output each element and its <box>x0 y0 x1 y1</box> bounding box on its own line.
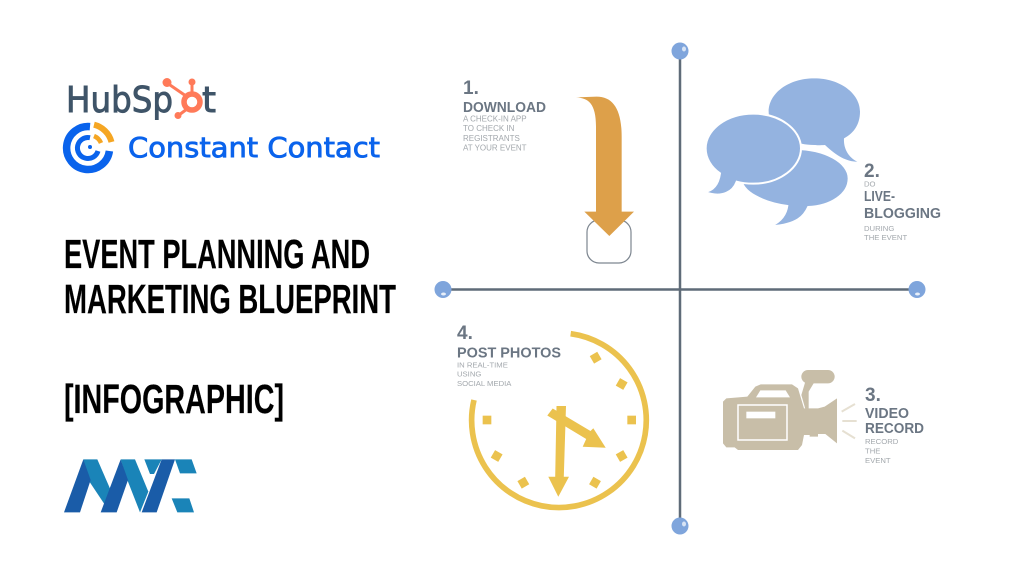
title: MARKETING BLUEPRINT <box>64 276 396 322</box>
logo: Constant Contact: Constant Contact <box>128 132 380 164</box>
text: live-blogging <box>864 161 941 242</box>
text: post photos: USING <box>457 370 481 378</box>
text: post photos: 4. <box>457 323 473 344</box>
text: download: AT YOUR EVENT <box>463 144 527 152</box>
text: download: REGISTRANTS <box>463 134 520 143</box>
text: post photos <box>457 323 561 388</box>
icon: clock <box>472 334 646 508</box>
text: video record: VIDEO <box>865 406 909 422</box>
text: post photos: SOCIAL MEDIA <box>457 379 512 388</box>
text: live-blogging: DO <box>864 180 876 188</box>
panel: step 3 video record <box>723 370 924 465</box>
text: download: DOWNLOAD <box>463 100 546 116</box>
text: video record: RECORD <box>865 421 924 437</box>
logo: Constant Contact <box>67 125 380 170</box>
text: download <box>463 78 546 152</box>
icon: speech bubbles <box>704 78 860 226</box>
text: video record: RECORD <box>865 437 899 446</box>
text: download: 1. <box>463 78 479 99</box>
text: download: A CHECK-IN APP <box>463 114 527 124</box>
title: EVENT PLANNING AND <box>64 231 370 277</box>
subtitle: [INFOGRAPHIC] <box>64 376 284 422</box>
text: video record: THE <box>865 446 880 456</box>
text: download: TO CHECK IN <box>463 124 515 133</box>
panel: step 4 post photos <box>457 323 646 508</box>
panel: step 2 live-blogging <box>704 78 941 242</box>
text: video record: 3. <box>865 385 881 406</box>
text: live-blogging: THE EVENT <box>864 233 907 242</box>
title <box>64 231 396 322</box>
icon: download arrow <box>576 97 634 236</box>
panel: step 1 download <box>463 78 634 263</box>
quadrant axes <box>434 42 926 534</box>
logo: HubSpot: t <box>202 80 216 121</box>
text: live-blogging: DURING <box>864 224 894 233</box>
text: video record: EVENT <box>865 456 891 465</box>
text: post photos: IN REAL-TIME <box>457 360 508 370</box>
icon: video camera <box>723 370 857 450</box>
text: post photos: POST PHOTOS <box>457 346 561 362</box>
logo: HubSpot: HubSp <box>66 80 173 121</box>
text: video record <box>865 385 924 465</box>
text: live-blogging: LIVE- <box>864 189 895 205</box>
logo: MMT <box>64 459 197 512</box>
text: live-blogging: BLOGGING <box>864 206 941 222</box>
icon: phone outline <box>587 220 631 263</box>
text: live-blogging: 2. <box>864 161 880 182</box>
